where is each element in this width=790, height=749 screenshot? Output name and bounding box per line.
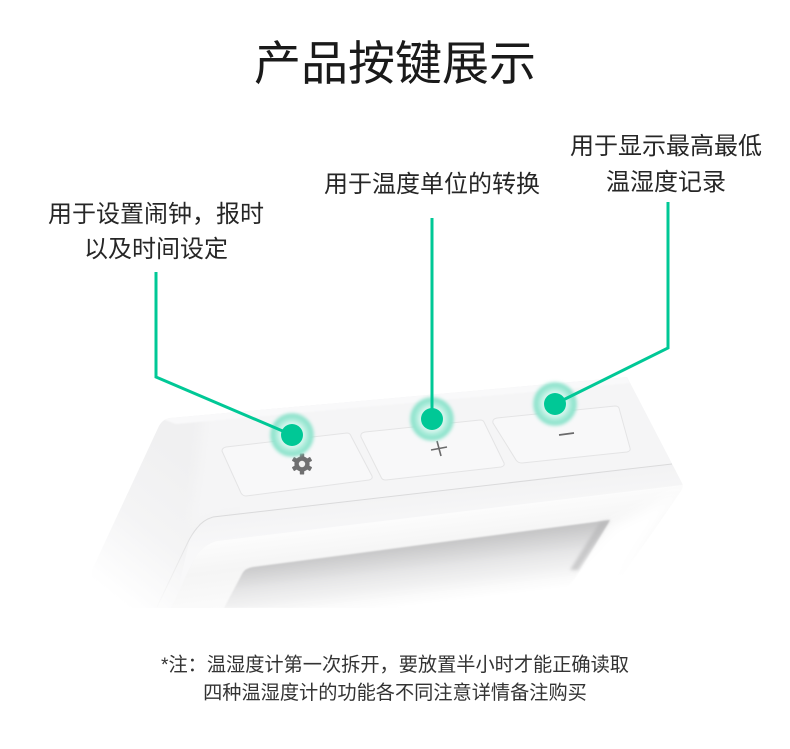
clean cut below the image (85, 608, 705, 620)
icon: plus (431, 441, 447, 456)
top face (190, 370, 690, 530)
seam line (157, 517, 213, 607)
footnote: *注：温湿度计第一次拆开，要放置半小时才能正确读取 (161, 655, 629, 676)
label: settings button (48, 201, 264, 263)
callout: minus line and dot (535, 202, 668, 424)
label: minus button: 用于显示最高最低 (570, 133, 762, 160)
button: plus (361, 420, 504, 480)
button: minus (493, 406, 630, 463)
icon: gear (292, 454, 312, 474)
screen shadow at right corner (570, 520, 610, 570)
lower band of the top face (325, 467, 682, 528)
callout: settings line and dot (156, 272, 312, 455)
label: minus button: 温湿度记录 (606, 169, 726, 196)
label: minus button (570, 133, 762, 196)
left side of body (114, 420, 201, 580)
icon: minus (559, 433, 574, 435)
title: 产品按键展示 (254, 37, 536, 90)
label: plus button: 用于温度单位的转换 (324, 171, 540, 198)
top face highlight (166, 416, 200, 423)
device body (114, 383, 682, 608)
footnote: 四种温湿度计的功能各不同注意详情备注购买 (203, 683, 587, 704)
button: settings (222, 433, 372, 496)
label: settings button: 以及时间设定 (84, 236, 228, 263)
footnote (161, 654, 629, 704)
label: settings button: 用于设置闹钟，报时 (48, 201, 264, 228)
device illustration and callout lines (114, 202, 682, 608)
screen recess (224, 520, 610, 608)
right part of the front fading out (620, 513, 658, 532)
callout: plus line and dot (412, 218, 452, 439)
front bezel (206, 514, 612, 556)
